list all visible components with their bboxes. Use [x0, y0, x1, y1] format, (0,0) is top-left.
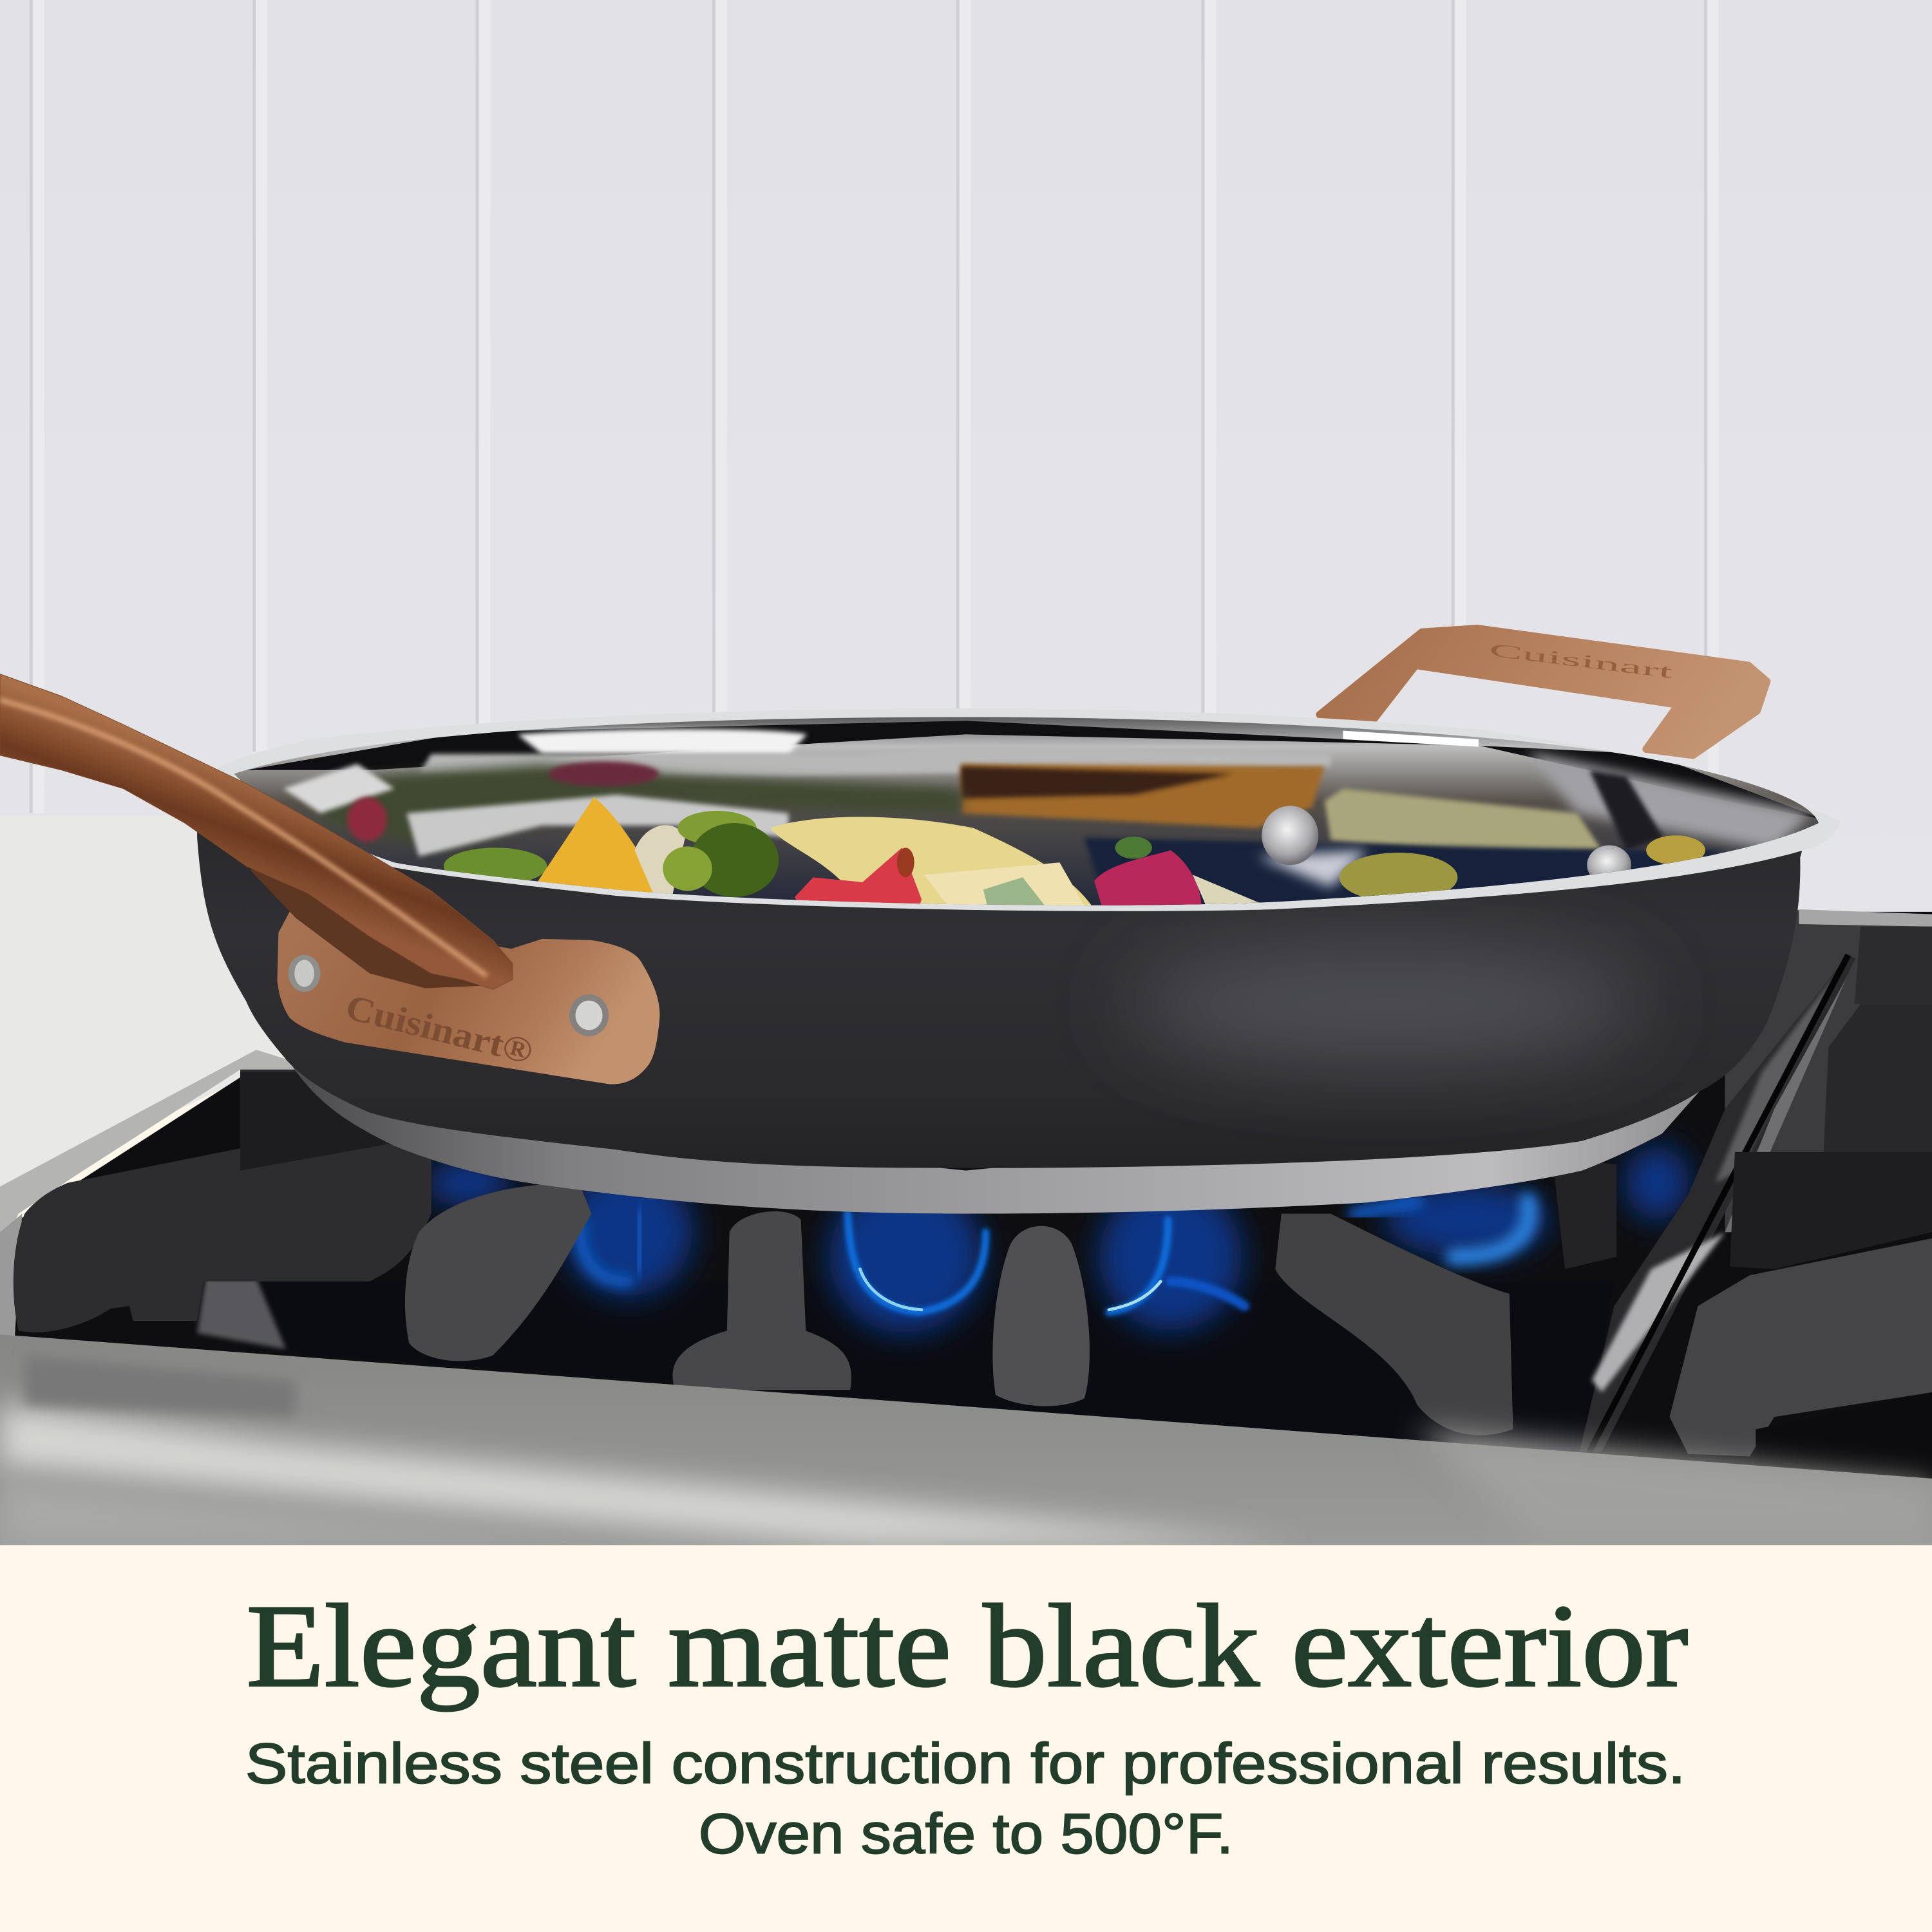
reflection: amber band: [961, 764, 1325, 828]
food: lemon wedge: [537, 797, 663, 895]
rail: burner divider: [1580, 955, 1855, 1452]
pan interior: [234, 717, 1819, 905]
caption panel: [0, 1545, 1932, 1932]
flame glow: [425, 1146, 1689, 1333]
subtitle line two: Oven safe to 500°F.: [699, 1802, 1233, 1866]
stove: cooktop surface and grates: [0, 909, 1932, 1545]
title: Elegant matte black exterior: [247, 1580, 1688, 1711]
stainless steel front edge: [0, 1334, 1932, 1545]
riveted copper handle plate: [250, 862, 659, 1084]
food: small broccoli: [1115, 837, 1152, 859]
pan: [197, 703, 1848, 1214]
pan black exterior: [197, 801, 1809, 1168]
countertop: [0, 816, 283, 1195]
grate: centre hub: [672, 1211, 851, 1390]
pan exterior sheen: [1128, 945, 1645, 1063]
subtitle line one: Stainless steel construction for professional results.: [245, 1731, 1685, 1795]
pan rivets: [1262, 806, 1318, 865]
grate: centre-left finger: [405, 1183, 591, 1361]
food: pink radish: [1094, 850, 1201, 909]
grate: centre finger: [992, 1226, 1090, 1406]
helper handle: [1320, 629, 1767, 755]
food: green square: [983, 877, 1045, 909]
food: olive reflected broccoli: [1340, 853, 1457, 902]
food: onion: [634, 825, 685, 900]
helper handle: Cuisinart: [1488, 639, 1674, 683]
pan stainless rim: [197, 708, 1841, 911]
blue flames: [579, 1201, 1529, 1312]
food: broccoli: [677, 811, 757, 845]
right grates: [1854, 927, 1932, 1004]
left steel edge: [0, 1050, 296, 1257]
reflection: greens: [308, 764, 961, 850]
grate: right arm: [1275, 1214, 1513, 1435]
pan steel base: [290, 1062, 1699, 1214]
handle mount shadow: [250, 862, 483, 988]
reflection: pale patch: [1325, 788, 1602, 853]
food: chicken: [770, 817, 1094, 909]
photo background: tiled wall: [0, 0, 1932, 936]
long copper handle: [0, 674, 513, 989]
back steel trim: [1725, 909, 1932, 1232]
food: roasted pepper: [795, 848, 922, 909]
food: left broccoli: [443, 848, 547, 880]
brand embossing: Cuisinart®: [342, 988, 536, 1072]
grate: left arm: [14, 1070, 431, 1332]
rivets: [289, 955, 320, 992]
reflection: lower dark blue: [1084, 838, 1725, 912]
glossy burner plate: [240, 1282, 1614, 1454]
grate: right rear post: [1553, 1158, 1616, 1269]
